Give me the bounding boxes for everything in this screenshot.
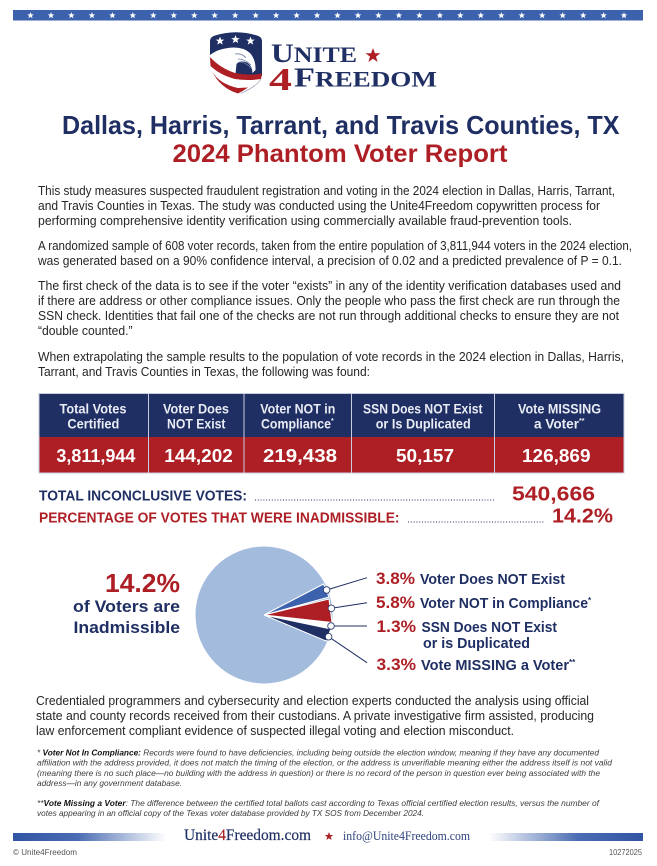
- title: 2024 Phantom Voter Report: [172, 140, 508, 168]
- title: [62, 110, 620, 168]
- logo wordmark: FREEDOM: [294, 62, 437, 92]
- results table: [39, 394, 624, 473]
- column: voter does not exist: 144,202: [164, 446, 233, 466]
- column: vote missing a voter: Vote MISSING: [518, 402, 601, 416]
- legend: voter not in compliance: *: [588, 596, 592, 605]
- paragraph: checks: SSN check. Identities that fail one of the checks are not run through additional checks to ensure they are not: [38, 309, 620, 323]
- logo wordmark: UNITE: [271, 38, 357, 68]
- column: total votes certified: [56, 402, 135, 466]
- legend: voter does not exist: 3.8%: [376, 570, 415, 588]
- legend: vote missing a voter: 3.3%: [376, 656, 416, 674]
- percentage of votes inadmissible: [39, 504, 613, 528]
- legend: voter not in compliance: 5.8%: [376, 594, 415, 612]
- column: voter not in compliance: [260, 402, 337, 466]
- column: SSN does not exist: SSN Does NOT Exist: [363, 402, 483, 416]
- legend: voter not in compliance: Voter NOT in Compliance: [420, 596, 588, 612]
- legend: vote missing a voter: [376, 656, 576, 674]
- paragraph: sample: [37, 239, 632, 268]
- footnote: voter not in compliance: affiliation with the address provided, it does not match the timing of the election, or the address is unverifiable meaning either the address itself is not valid: [37, 758, 612, 768]
- callout: 14.2% of voters are inadmissible: [73, 568, 180, 637]
- column: total votes certified: Total Votes: [60, 402, 126, 416]
- column: SSN does not exist: or Is Duplicated: [376, 416, 471, 432]
- title: Dallas, Harris, Tarrant, and Travis Counties, TX: [62, 110, 620, 140]
- column: vote missing a voter: 126,869: [522, 446, 590, 466]
- column: voter does not exist: [163, 402, 233, 466]
- column: voter does not exist: Voter Does: [163, 402, 229, 416]
- top star banner: [13, 10, 643, 20]
- copyright: © Unite4Freedom: [13, 847, 77, 857]
- closing paragraph: Credentialed programmers and cybersecurity and election experts conducted the analysis using official: [36, 694, 589, 708]
- column: SSN does not exist: 50,157: [396, 446, 454, 466]
- logo wordmark: [269, 38, 437, 97]
- column: voter not in compliance: 219,438: [263, 446, 337, 466]
- footnote: voter not in compliance: [37, 748, 612, 788]
- legend: SSN does not exist: SSN Does NOT Exist: [422, 620, 557, 636]
- closing paragraph: [36, 694, 594, 738]
- callout: 14.2% of voters are inadmissible: Inadmissible: [74, 618, 180, 637]
- intro paragraph: study description: and Travis Counties in Texas. The study was conducted using the Unite4Freedom copywritten process for: [38, 199, 600, 213]
- column: voter not in compliance: *: [331, 418, 334, 425]
- legend: voter does not exist: Voter Does NOT Exist: [420, 572, 565, 588]
- total inconclusive votes: TOTAL INCONCLUSIVE VOTES:: [39, 488, 247, 504]
- column: SSN does not exist: [363, 402, 483, 466]
- paragraph: checks: if there are address or other compliance issues. Only the people who pass the first check are run through the: [38, 294, 620, 308]
- icon: eagle shield: [210, 32, 262, 94]
- paragraph: extrapolation: [38, 350, 624, 379]
- column: total votes certified: Certified: [67, 416, 119, 432]
- paragraph: checks: “double counted.”: [38, 324, 132, 338]
- paragraph: checks: [38, 279, 621, 338]
- legend: SSN does not exist: [376, 618, 557, 652]
- paragraph: checks: The first check of the data is to see if the voter “exists” in any of the identity verification databases used and: [38, 279, 621, 293]
- column: voter not in compliance: Voter NOT in: [260, 402, 335, 416]
- column: vote missing a voter: a Voter: [534, 416, 580, 432]
- footnote: voter not in compliance: * Voter Not In Compliance: Records were found to have deficiencies, including being outside the election window, meaning if they have any documented: [37, 748, 599, 758]
- callout: 14.2% of voters are inadmissible: of Voters are: [73, 597, 180, 616]
- column: vote missing a voter: [518, 402, 601, 466]
- legend: voter does not exist: [376, 570, 565, 588]
- legend: voter not in compliance: [376, 594, 592, 612]
- callout: 14.2% of voters are inadmissible: 14.2%: [105, 568, 180, 598]
- document code: 10272025: [609, 847, 642, 857]
- footer bar with contact details: Unite4Freedom.com: [184, 827, 312, 844]
- column: vote missing a voter: **: [579, 418, 585, 425]
- footer bar with contact details: [13, 827, 643, 844]
- legend: SSN does not exist: 1.3%: [376, 618, 416, 636]
- logo: Unite 4 Freedom: [210, 32, 437, 97]
- intro paragraph: study description: This study measures suspected fraudulent registration and voting in the 2024 election in Dallas, Harris, Tarrant,: [38, 184, 615, 198]
- total inconclusive votes: 540,666: [512, 482, 595, 506]
- pie chart: [196, 546, 367, 684]
- footnote: voter not in compliance: address—in any government database.: [37, 778, 182, 788]
- legend: SSN does not exist: or is Duplicated: [423, 636, 530, 652]
- footnote: vote missing a voter: **Vote Missing a Voter: The difference between the certified total ballots cast according to Texas official certified election results, versus the number of: [37, 798, 601, 808]
- closing paragraph: state and county records received from their custodians. A private investigative firm assisted, producing: [36, 709, 594, 723]
- column: voter does not exist: NOT Exist: [167, 416, 226, 432]
- legend: vote missing a voter: Vote MISSING a Voter: [421, 658, 569, 674]
- footer bar with contact details: info@Unite4Freedom.com: [343, 828, 470, 843]
- legend: vote missing a voter: **: [569, 658, 576, 667]
- footnote: vote missing a voter: votes appearing in an official copy of the Texas voter database provided by TX SOS from December 2024.: [37, 808, 424, 818]
- intro paragraph: study description: [38, 184, 615, 228]
- paragraph: extrapolation: Tarrant, and Travis Counties in Texas, the following was found:: [38, 365, 370, 379]
- column: total votes certified: 3,811,944: [56, 446, 135, 466]
- logo wordmark: 4: [269, 61, 292, 97]
- column: voter not in compliance: Compliance: [261, 416, 331, 432]
- footnote: vote missing a voter: [37, 798, 601, 818]
- footnote: voter not in compliance: (meaning there is no such place—no building with the address in question) or there is no record of the person in question ever being associated with the: [37, 768, 600, 778]
- intro paragraph: study description: performing comprehensive identity verification using commercially available fraud-prevention tools.: [38, 214, 572, 228]
- paragraph: sample: was generated based on a 90% confidence interval, a precision of 0.02 and a predicted prevalence of P = 0.1.: [37, 254, 622, 268]
- closing paragraph: law enforcement compliant evidence of suspected illegal voting and election misconduct.: [36, 724, 514, 738]
- total inconclusive votes: [39, 482, 595, 506]
- paragraph: extrapolation: When extrapolating the sample results to the population of vote records in the 2024 election in Dallas, Harris,: [38, 350, 624, 364]
- percentage of votes inadmissible: PERCENTAGE OF VOTES THAT WERE INADMISSIBLE:: [39, 510, 400, 526]
- percentage of votes inadmissible: 14.2%: [552, 504, 613, 528]
